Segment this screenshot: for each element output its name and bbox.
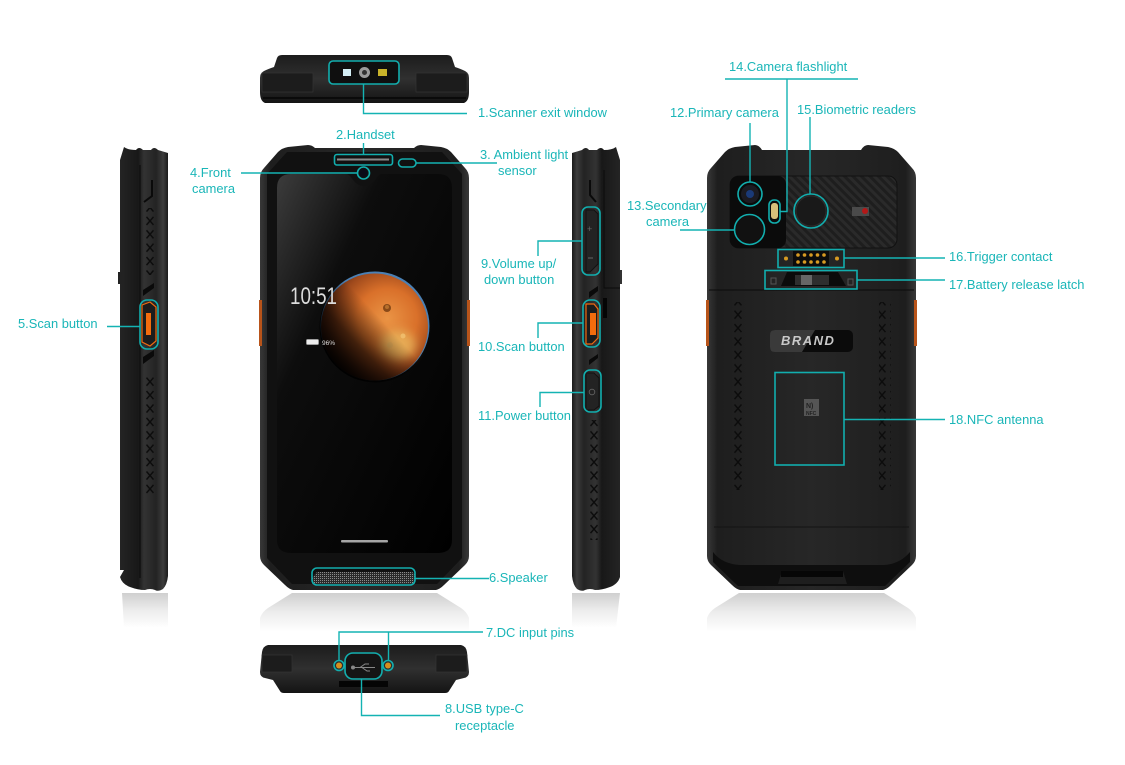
callout 18: NFC antenna: 18.NFC antenna: [949, 412, 1044, 427]
callout 4: front camera: 4.Front: [190, 165, 231, 180]
phone: bottom edge view: [260, 645, 469, 693]
nfc mark: N): [806, 403, 813, 410]
callout 12: primary camera: 12.Primary camera: [670, 105, 780, 120]
volume key: [586, 210, 598, 272]
callout 17: battery release latch: 17.Battery release latch: [949, 277, 1084, 292]
callout 16: trigger contact: [778, 249, 1053, 268]
callout 6: speaker: 6.Speaker: [489, 570, 548, 585]
callout 9: volume button: 9.Volume up/: [481, 256, 557, 271]
callout 11: power button: 11.Power button: [478, 408, 571, 423]
phone: left side view: [118, 147, 168, 591]
nfc mark: NFC: [806, 411, 817, 417]
callout 13: secondary camera: camera: [646, 214, 690, 229]
callout 14: camera flashlight: [725, 59, 858, 223]
callout 14: camera flashlight: 14.Camera flashlight: [729, 59, 848, 74]
battery status: 96%: [322, 340, 335, 347]
callout 5: scan button: [18, 300, 158, 349]
phone: back view: [706, 145, 917, 590]
callout 4: front camera: camera: [192, 181, 236, 196]
callout 1: scanner exit window: [329, 61, 608, 120]
callout 4: front camera: [190, 165, 370, 196]
phone: front view: [259, 145, 470, 590]
nfc mark: [804, 399, 819, 417]
camera island: [730, 176, 786, 248]
callout 7: DC input pins: [334, 625, 574, 670]
phone: top edge view: [260, 55, 469, 103]
carbon camera panel: [730, 176, 897, 248]
mars wallpaper: [320, 272, 430, 382]
orange scan key: [142, 302, 156, 346]
orange scan key: [586, 304, 598, 344]
callout 11: power button: [478, 370, 601, 423]
callout 9: volume button: down button: [484, 272, 554, 287]
panel badge: [852, 207, 869, 216]
callout 16: trigger contact: 16.Trigger contact: [949, 249, 1053, 264]
callout 17: battery release latch: [765, 270, 1084, 292]
callout 2: handset: [334, 127, 395, 165]
callout 7: DC input pins: 7.DC input pins: [486, 625, 574, 640]
callout 3: ambient light sensor: [398, 147, 569, 178]
callout 2: handset: 2.Handset: [336, 127, 395, 142]
touch screen: [277, 174, 452, 553]
pogo pins: [784, 251, 839, 266]
callout 3: ambient light sensor: 3. Ambient light: [480, 147, 569, 162]
brand logo plate: [770, 330, 853, 352]
callout 13: secondary camera: [627, 198, 764, 244]
callout 9: volume button: [481, 207, 600, 287]
callout 10: scan button: 10.Scan button: [478, 339, 565, 354]
callout 8: USB type-C receptacle: 8.USB type-C: [445, 701, 524, 716]
callout 15: biometric readers: [794, 102, 916, 228]
reflections beneath phones: [122, 593, 916, 632]
scanner window: [329, 61, 399, 84]
callout 12: primary camera: [670, 105, 780, 206]
callout 8: USB type-C receptacle: receptacle: [455, 718, 514, 733]
battery latch: [771, 272, 853, 286]
callout 18: NFC antenna: [775, 372, 1044, 465]
speaker grille: [312, 572, 415, 584]
callout 5: scan button: 5.Scan button: [18, 316, 98, 331]
brand logo plate: BRAND: [781, 333, 835, 348]
volume key: +: [587, 224, 592, 234]
callout 13: secondary camera: 13.Secondary: [627, 198, 707, 213]
callout 10: scan button: [478, 300, 600, 354]
callout 8: USB type-C receptacle: [345, 653, 524, 733]
callout 15: biometric readers: 15.Biometric readers: [797, 102, 916, 117]
battery status: [306, 340, 335, 347]
callout 6: speaker: [312, 568, 548, 585]
callout 3: ambient light sensor: sensor: [498, 163, 537, 178]
callout 1: scanner exit window: 1.Scanner exit window: [478, 105, 608, 120]
power key: [586, 373, 599, 410]
clock: 10:51: [290, 283, 337, 310]
fingerprint reader: [796, 196, 826, 226]
phone: right side view: [572, 147, 622, 591]
